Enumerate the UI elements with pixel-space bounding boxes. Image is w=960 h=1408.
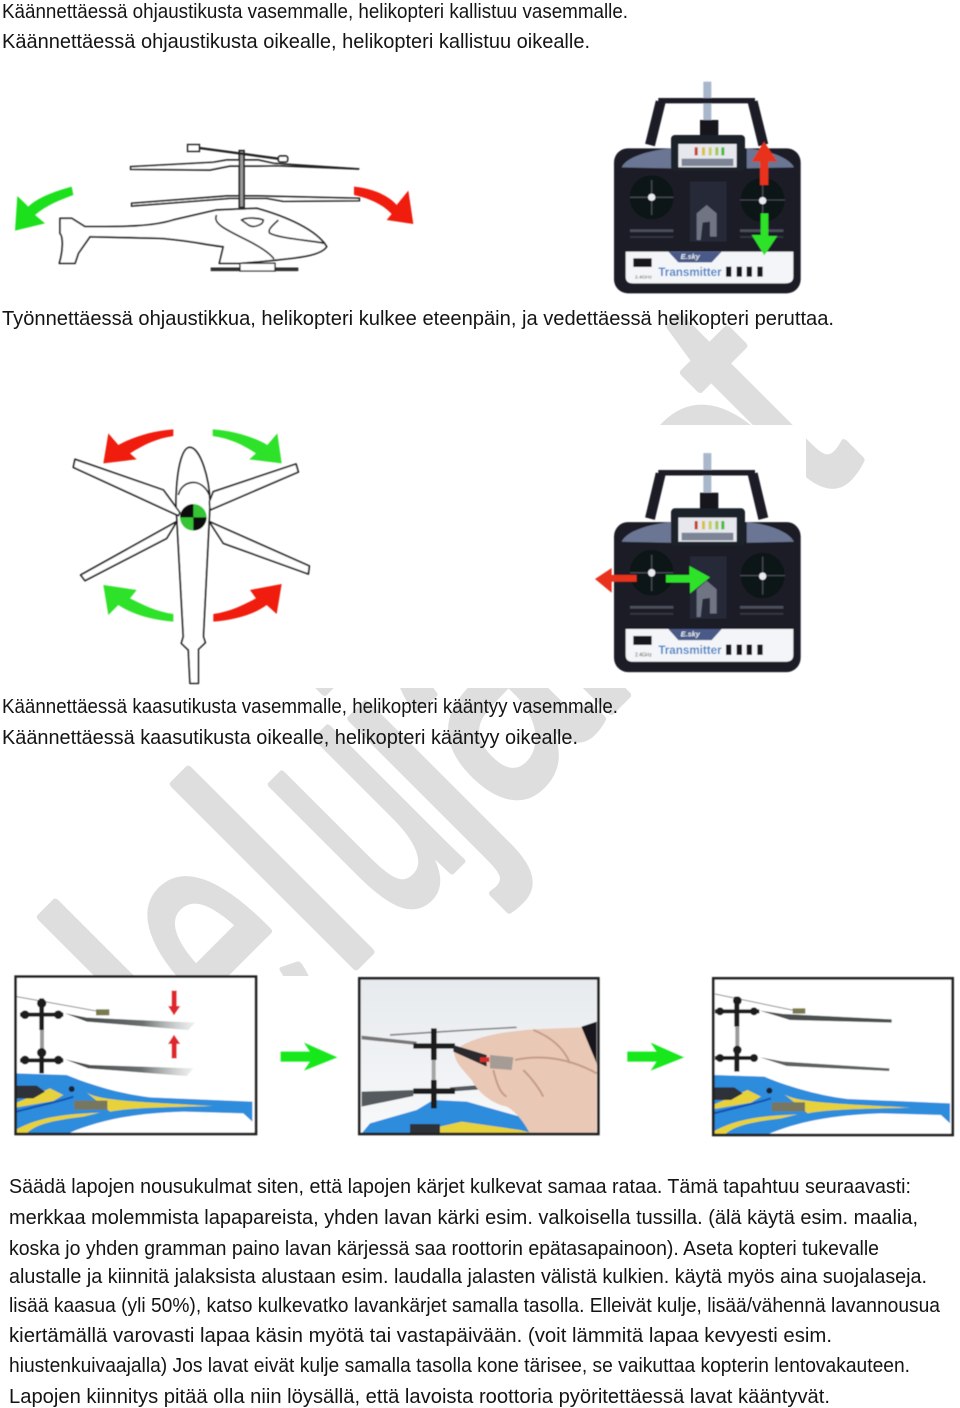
white backing of first illustration row	[0, 60, 960, 304]
arrow: red bottom right	[213, 584, 282, 622]
illustration: transmitter with horizontal stick arrows	[595, 453, 801, 672]
text: forward and back instruction: Työnnettäessä ohjaustikkua, helikopteri kulkee eteenpäin, ja vedettäessä helikopteri peruttaa.	[2, 308, 834, 330]
panel: aligned blades	[713, 978, 953, 1135]
rotors and mast	[131, 145, 359, 207]
blades and fuselage	[73, 447, 309, 683]
arrow: red top left	[103, 429, 173, 463]
arrow: green bottom left	[103, 585, 173, 622]
white backing of image strip	[0, 976, 960, 1141]
panel: adjusting blade by hand	[359, 978, 598, 1134]
text: blade tracking instructions: lisää kaasua (yli 50%), katso kulkevatko lavankärjet samalla tasolla. Elleivät kulje, lisää/vähennä lavannousua	[9, 1295, 941, 1317]
arrow: green top right	[213, 429, 282, 463]
white backing of second illustration row	[0, 425, 806, 688]
arrow: green step two	[627, 1043, 684, 1071]
watermark: leluja.net: a	[276, 490, 658, 873]
text: yaw instructions: Käännettäessä kaasutikusta vasemmalle, helikopteri kääntyy vasemmalle.	[2, 696, 618, 718]
watermark: leluja.net: e	[29, 758, 391, 1120]
text: roll instructions: Käännettäessä ohjaustikusta vasemmalle, helikopteri kallistuu vasemmalle.	[2, 1, 628, 23]
panel: uneven blades	[16, 977, 256, 1134]
arrow: green step one	[281, 1043, 337, 1071]
fuselage outline	[59, 208, 327, 263]
watermark: leluja.net: e	[535, 296, 877, 638]
arrow: green down	[752, 213, 777, 255]
arrow: red right	[354, 187, 413, 224]
watermark: leluja.net: t	[586, 231, 918, 562]
text: blade tracking instructions: koska jo yhden gramman paino lavan kärjessä saa roottorin epätasapainoon). Aseta kopteri tukevalle	[9, 1238, 879, 1260]
text: blade tracking instructions: merkkaa molemmista lapapareista, yhden lavan kärki esim. valkoisella tussilla. (älä käytä esim. maalia,	[9, 1207, 918, 1229]
image strip: blade tracking steps	[16, 977, 953, 1135]
skids	[211, 264, 298, 275]
text: blade tracking instructions: Säädä lapojen nousukulmat siten, että lapojen kärjet kulkevat samaa rataa. Tämä tapahtuu seuraavasti:	[9, 1176, 911, 1198]
arrow: green right	[666, 566, 710, 593]
text: roll instructions: Käännettäessä ohjaustikusta oikealle, helikopteri kallistuu oikealle.	[2, 31, 590, 53]
text: yaw instructions: Käännettäessä kaasutikusta oikealle, helikopteri kääntyy oikealle.	[2, 727, 578, 749]
arrow: green left	[15, 187, 73, 231]
rotor hub	[180, 504, 207, 531]
watermark: leluja.net: .	[367, 451, 698, 782]
arrow: red up	[752, 142, 777, 185]
watermark: leluja.net: u	[168, 624, 525, 981]
watermark: leluja.net	[0, 231, 918, 1166]
text: roll instructions	[2, 1, 628, 53]
text: blade tracking instructions	[9, 1176, 941, 1408]
arrow: red left	[595, 568, 637, 593]
text: blade tracking instructions: Lapojen kiinnitys pitää olla niin löysällä, että lavoista roottoria pyöritettäessä lavat kääntyvät.	[9, 1386, 830, 1408]
text: blade tracking instructions: alustalle ja kiinnitä jalaksista alustaan esim. laudalla jalasten välistä kulkien. käytä myös aina suojalaseja.	[9, 1266, 927, 1288]
text: blade tracking instructions: hiustenkuivaajalla) Jos lavat eivät kulje samalla tasolla kone tärisee, se vaikuttaa kopterin lentovakauteen.	[9, 1355, 910, 1377]
watermark: leluja.net: j	[244, 602, 557, 915]
watermark: leluja.net: n	[409, 366, 782, 739]
illustration: helicopter top view with yaw arrows	[73, 429, 309, 683]
text: yaw instructions	[2, 696, 618, 749]
illustration: transmitter with vertical stick arrows	[614, 82, 801, 293]
text: blade tracking instructions: kiertämällä varovasti lapaa käsin myötä tai vastapäivään. (voit lämmitä lapaa kevyesti esim.	[9, 1325, 832, 1347]
illustration: helicopter side view with tilt arrows	[15, 145, 413, 271]
watermark: leluja.net: l	[116, 712, 437, 1033]
